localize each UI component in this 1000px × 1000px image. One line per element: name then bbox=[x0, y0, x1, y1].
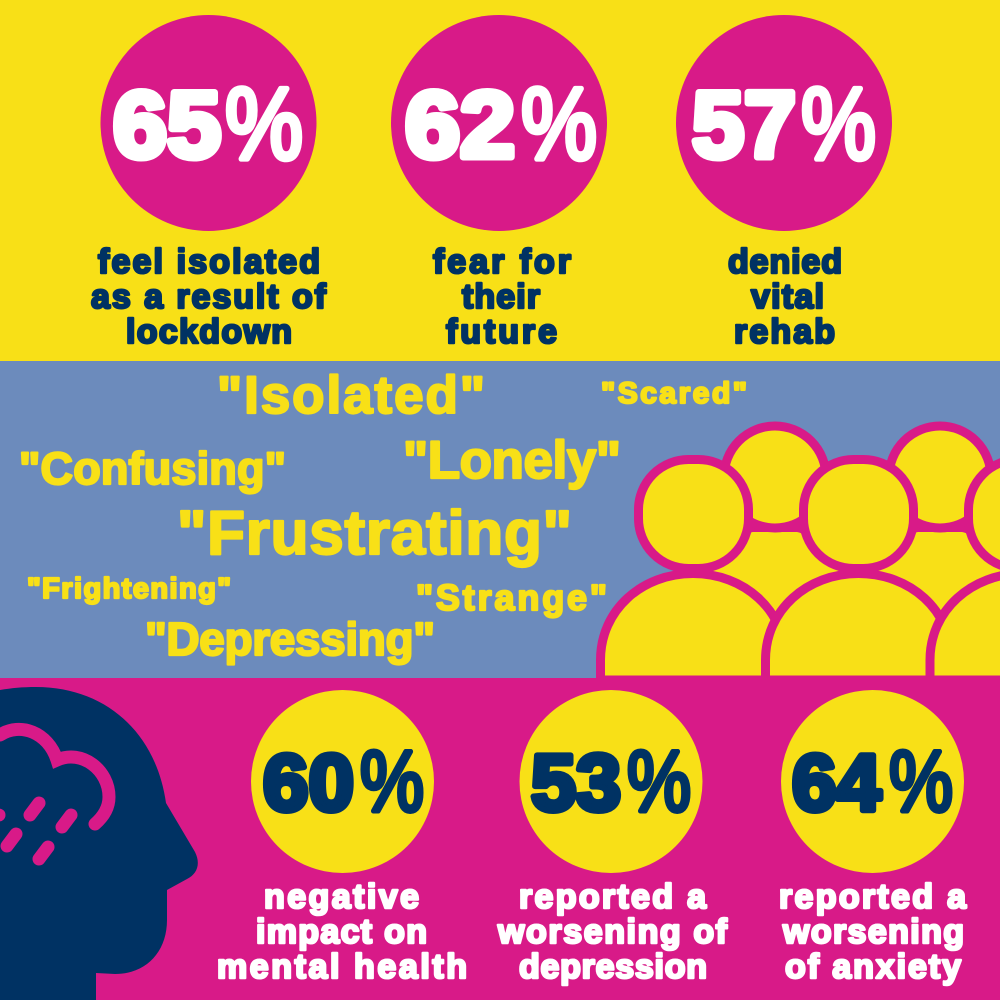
stat: 57% denied vital rehab bbox=[676, 15, 892, 351]
stat: 64% worsening of anxiety: of anxiety bbox=[785, 948, 961, 986]
panel: bottom statistics band bbox=[0, 678, 1000, 1000]
stat: 62% fear for their future: fear for bbox=[433, 243, 571, 281]
stat: 53% worsening of depression: worsening of bbox=[497, 913, 728, 951]
stat: 53% worsening of depression: reported a bbox=[519, 878, 707, 916]
icon: group of people bbox=[600, 426, 1000, 700]
stat: 57% denied vital rehab: denied bbox=[728, 243, 842, 281]
stat: 60% negative impact on mental health: impact on bbox=[256, 913, 427, 951]
word cloud: "Strange" bbox=[416, 577, 607, 618]
stat: 53% worsening of depression: % bbox=[627, 734, 691, 830]
word cloud: "Depressing" bbox=[145, 613, 435, 665]
word cloud: "Frightening" bbox=[27, 573, 231, 605]
icon: head with rain cloud bbox=[0, 687, 198, 1000]
stat: 53% worsening of depression: depression bbox=[519, 948, 707, 986]
stat: 65% feel isolated: 65 bbox=[113, 72, 221, 177]
stat: 65% feel isolated bbox=[91, 15, 327, 351]
stat: 64% worsening of anxiety bbox=[779, 690, 967, 986]
stat: 57% denied vital rehab: 57 bbox=[692, 72, 796, 177]
stat: 62% fear for their future: their bbox=[462, 278, 540, 316]
stat: 57% denied vital rehab: rehab bbox=[734, 313, 835, 351]
stat: 53% worsening of depression: 53 bbox=[531, 738, 621, 827]
stat: 60% negative impact on mental health bbox=[217, 690, 467, 986]
stat: 65% feel isolated: feel isolated bbox=[98, 243, 320, 281]
stat: 60% negative impact on mental health: mental health bbox=[217, 948, 467, 986]
stat: 60% negative impact on mental health: % bbox=[360, 734, 424, 830]
word cloud bbox=[19, 366, 747, 665]
stat: 62% fear for their future: % bbox=[521, 67, 597, 181]
stat: 57% denied vital rehab: vital bbox=[751, 278, 824, 316]
stat: 60% negative impact on mental health: 60 bbox=[263, 738, 354, 827]
stat: 64% worsening of anxiety: worsening bbox=[782, 913, 964, 951]
stat: 53% worsening of depression bbox=[497, 690, 728, 986]
word cloud: "Frustrating" bbox=[177, 499, 572, 568]
word cloud: "Confusing" bbox=[19, 443, 286, 494]
word cloud: "Isolated" bbox=[217, 366, 485, 425]
stat: 60% negative impact on mental health: negative bbox=[264, 878, 419, 916]
stat: 65% feel isolated: as a result of bbox=[91, 278, 327, 316]
stat: 62% fear for their future: future bbox=[446, 313, 557, 351]
stat: 64% worsening of anxiety: reported a bbox=[779, 878, 967, 916]
panel: top statistics bbox=[91, 15, 892, 351]
stat: 65% feel isolated: % bbox=[225, 67, 303, 181]
stat: 62% fear for their future bbox=[391, 15, 607, 351]
word cloud: "Scared" bbox=[601, 377, 747, 410]
stat: 57% denied vital rehab: % bbox=[801, 67, 876, 181]
word cloud: "Lonely" bbox=[403, 431, 621, 490]
stat: 64% worsening of anxiety: 64 bbox=[792, 738, 882, 827]
stat: 62% fear for their future: 62 bbox=[405, 72, 515, 177]
panel: word cloud band bbox=[0, 361, 1000, 679]
stat: 64% worsening of anxiety: % bbox=[889, 734, 953, 830]
stat: 65% feel isolated: lockdown bbox=[126, 313, 292, 351]
